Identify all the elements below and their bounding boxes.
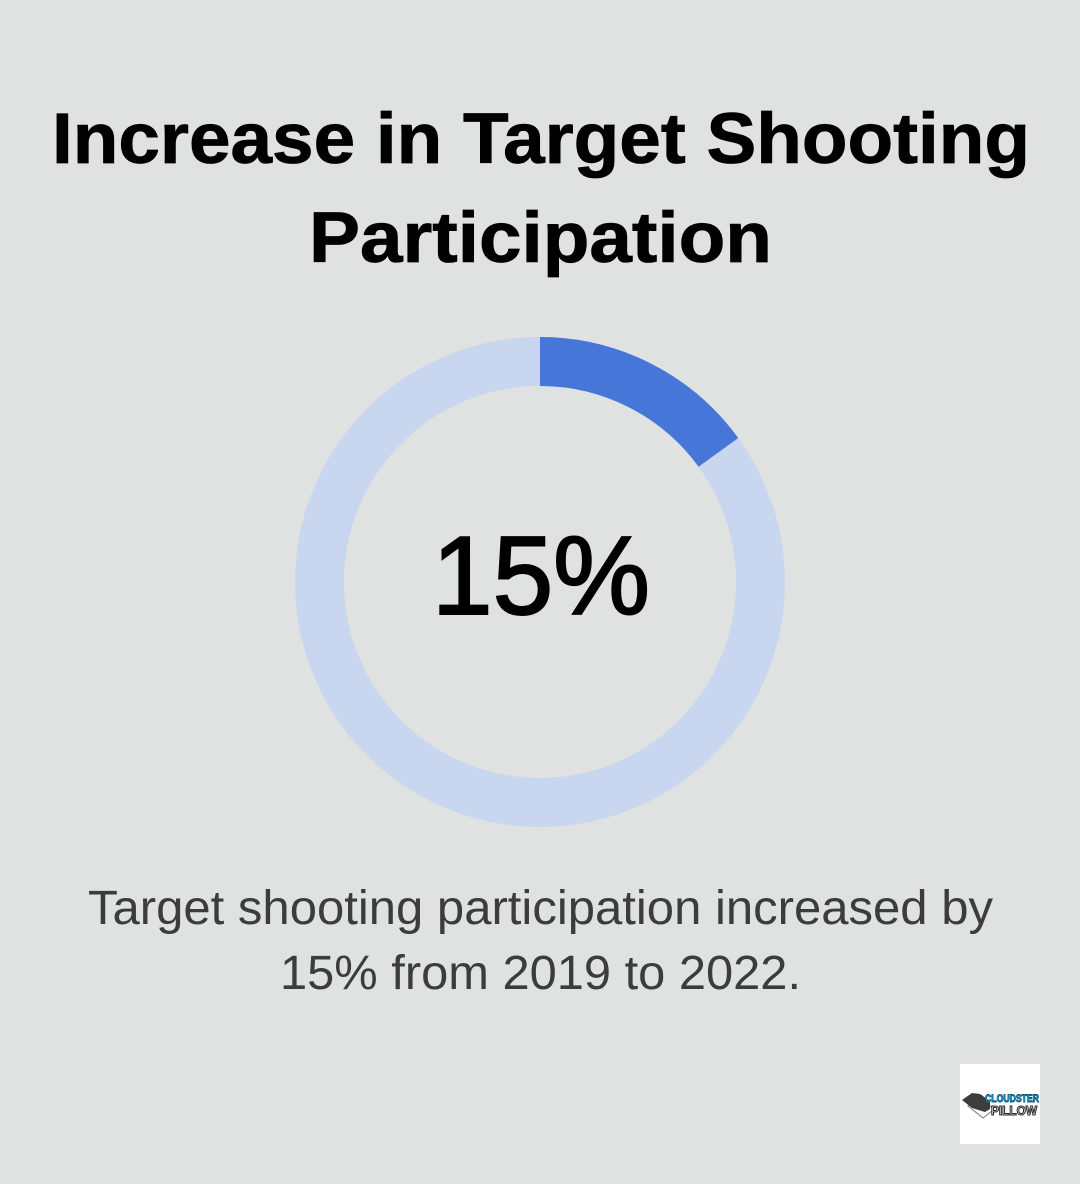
- title: [52, 100, 1030, 278]
- logo wordmark: PILLOW: [991, 1103, 1038, 1118]
- icon: pillow: [962, 1093, 992, 1118]
- title: Participation: [309, 199, 772, 278]
- donut chart: 15%: [320, 362, 760, 802]
- description text: [88, 882, 993, 1000]
- description text: 15% from 2019 to 2022.: [280, 947, 801, 1000]
- highlighted 15% segment: [540, 362, 718, 452]
- description text: Target shooting participation increased by: [88, 882, 993, 935]
- title: Increase in Target Shooting: [52, 100, 1030, 179]
- logo wordmark: [985, 1093, 1039, 1118]
- logo badge: [960, 1064, 1040, 1144]
- center value: 15%: [432, 514, 650, 638]
- logo wordmark: CLOUDSTER: [985, 1093, 1039, 1105]
